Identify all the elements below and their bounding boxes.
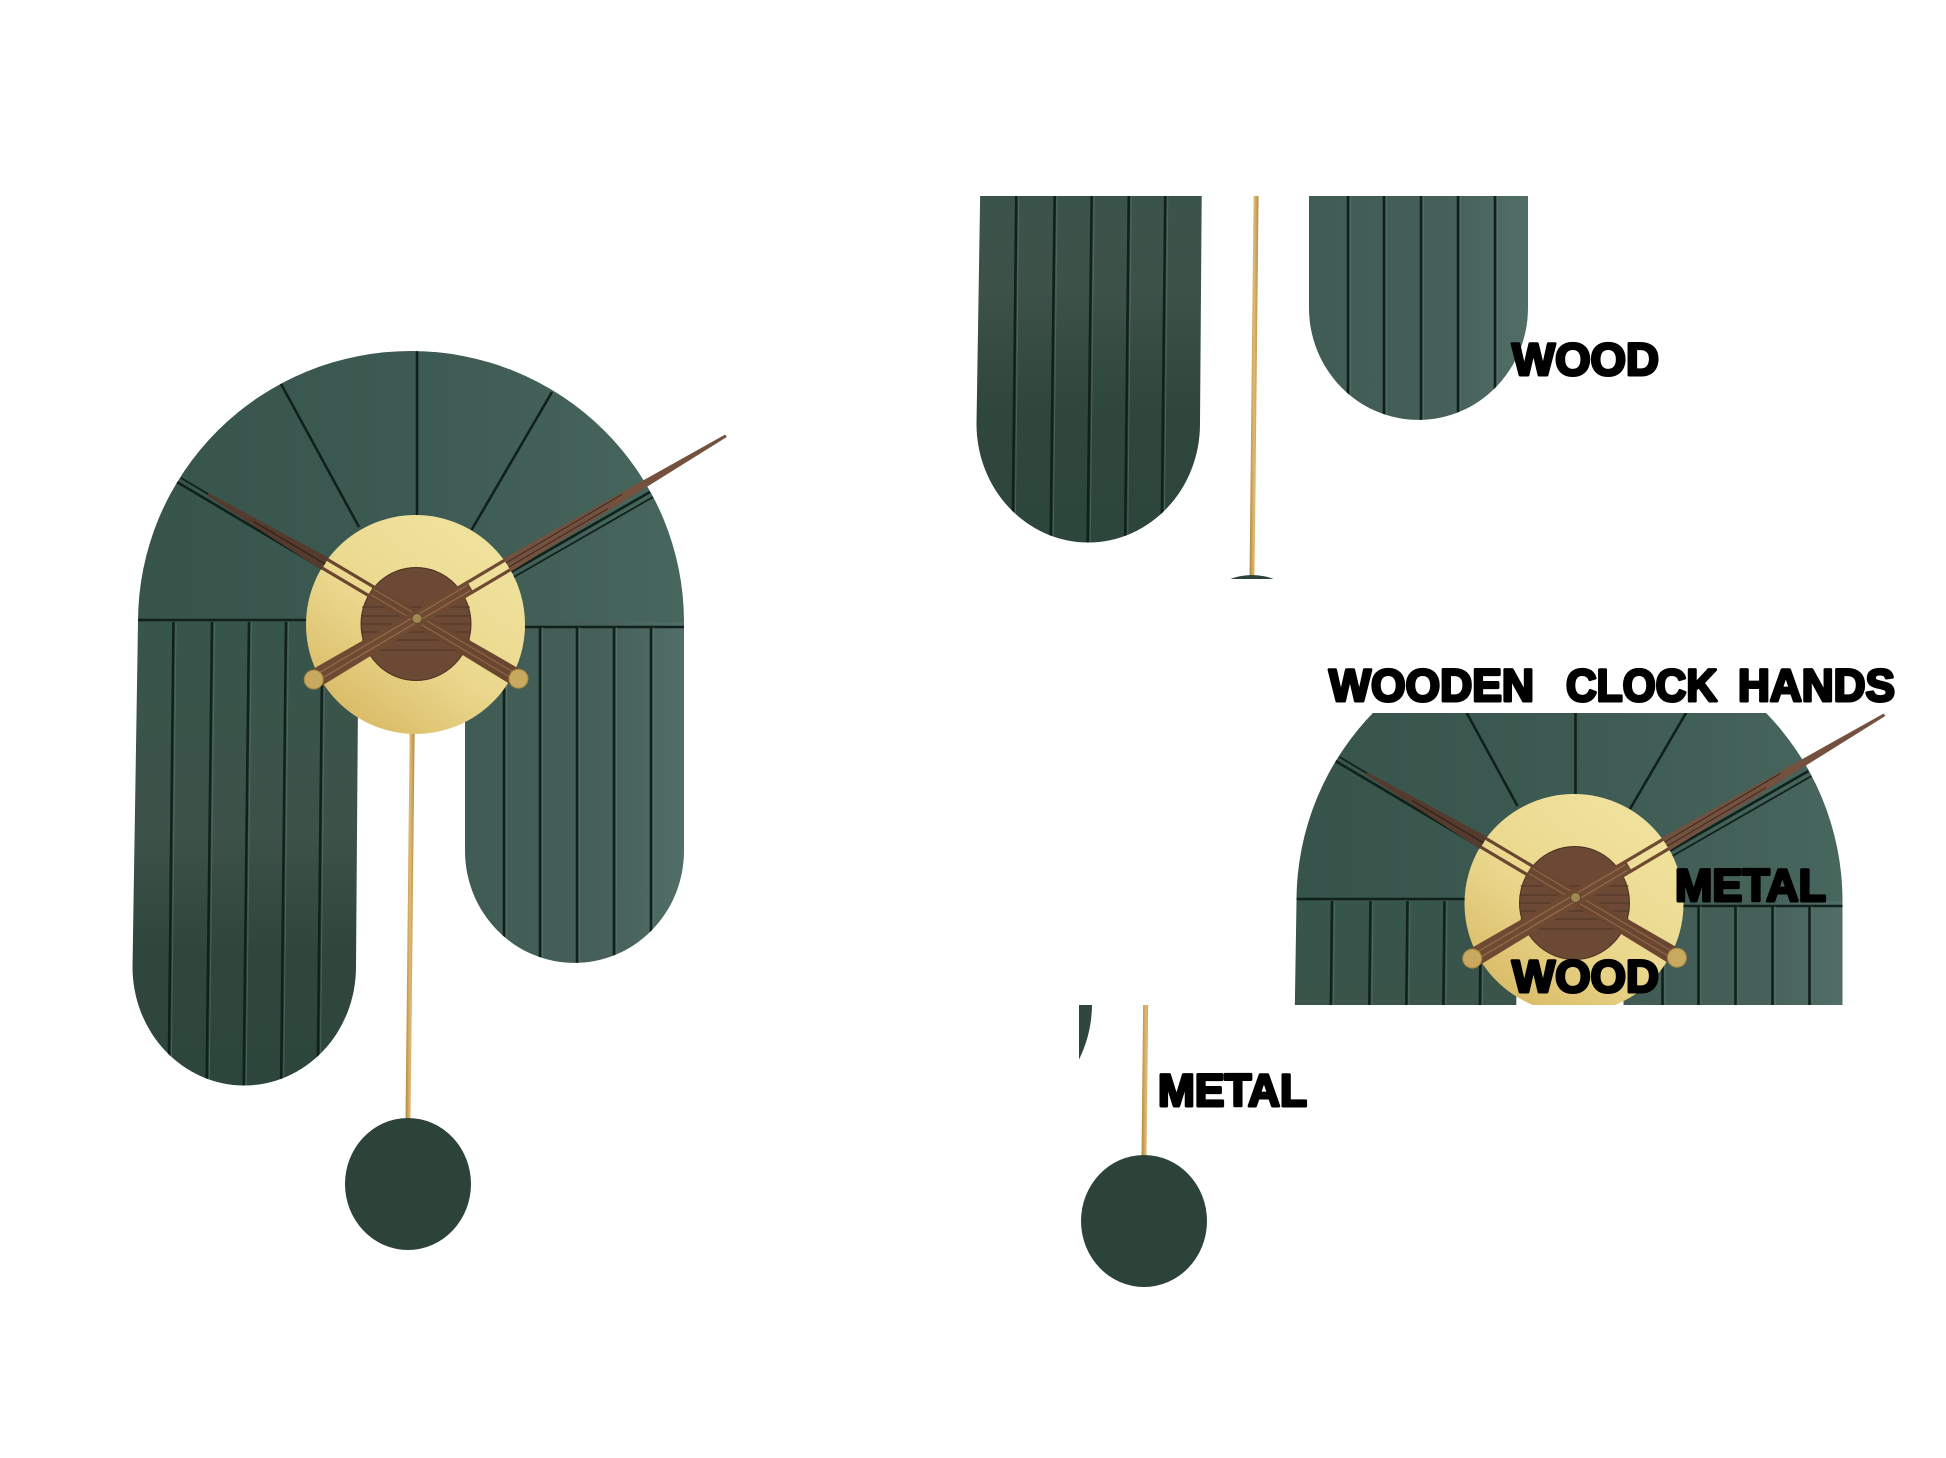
heading: wooden clock hands <box>1329 660 1895 711</box>
groove highlights <box>171 622 654 1100</box>
walnut centre disc <box>361 568 471 680</box>
clock body and face <box>120 340 731 1102</box>
panel: full clock <box>132 351 727 1250</box>
label: wood on legs: WOOD <box>1512 334 1659 385</box>
heading: wooden clock hands: HANDS <box>1738 660 1895 711</box>
panel: detail crop of pendulum <box>1079 1005 1207 1287</box>
panel: detail crop of clock face and hands <box>1294 713 1886 1005</box>
heading: wooden clock hands: CLOCK <box>1566 660 1717 711</box>
panel: detail crop of wooden legs and rod <box>976 196 1528 579</box>
pendulum <box>345 700 471 1250</box>
body panels: arch and two legs <box>120 340 700 1102</box>
label: metal on dial: METAL <box>1675 860 1826 911</box>
grooves in the body panels <box>130 345 690 1100</box>
walnut grain <box>361 607 471 650</box>
short wooden hand <box>203 486 531 692</box>
pendulum rod <box>406 700 415 1122</box>
long wooden hand <box>301 428 731 693</box>
heading: wooden clock hands: WOODEN <box>1329 660 1534 711</box>
label: metal on pendulum rod: METAL <box>1158 1065 1307 1116</box>
label: wood on centre disc: WOOD <box>1512 951 1659 1002</box>
centre pivot pin <box>412 614 422 624</box>
pendulum disc <box>345 1118 471 1250</box>
brass dial disc <box>306 515 525 734</box>
